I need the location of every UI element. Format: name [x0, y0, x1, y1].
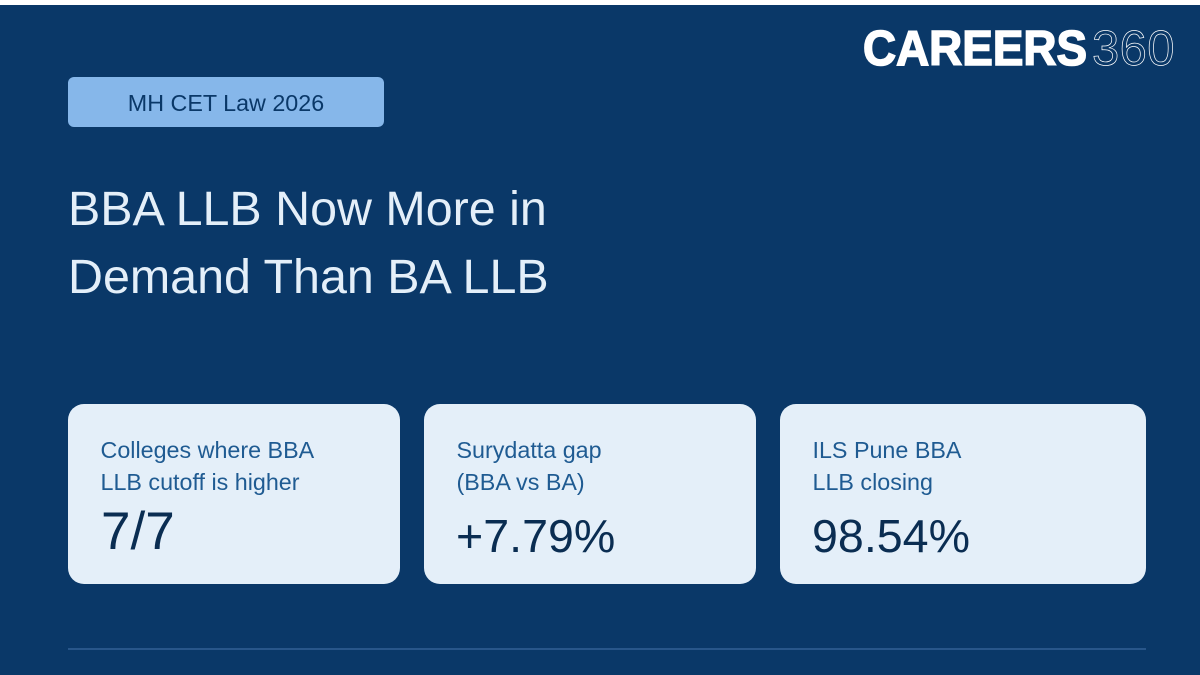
panel: colleges stat: [68, 404, 400, 584]
panel: ILS Pune stat: [780, 404, 1146, 584]
title: Demand Than BA LLB: [68, 250, 549, 304]
logo: Careers360: CAREERS: [863, 22, 1087, 76]
logo: Careers360: 360: [1092, 22, 1175, 76]
label: colleges: Colleges where BBA: [100, 437, 314, 463]
label: Surydatta: [456, 437, 602, 495]
label: colleges: [100, 437, 314, 495]
panel: Surydatta gap stat: [424, 404, 756, 584]
value: 7/7: 7/7: [101, 502, 175, 561]
label: ILS Pune: ILS Pune BBA: [812, 437, 961, 463]
badge: MH CET Law 2026: [68, 77, 384, 127]
label: Surydatta: (BBA vs BA): [456, 469, 585, 495]
value: 98.54%: 98.54%: [812, 510, 970, 562]
label: Surydatta: Surydatta gap: [456, 437, 602, 463]
value: +7.79%: +7.79%: [456, 510, 615, 562]
title: [68, 182, 549, 304]
label: ILS Pune: [812, 437, 962, 495]
label: ILS Pune: LLB closing: [812, 469, 933, 495]
badge: MH CET Law 2026: MH CET Law 2026: [128, 90, 324, 116]
label: colleges: LLB cutoff is higher: [100, 469, 300, 495]
title: BBA LLB Now More in: [68, 182, 547, 236]
